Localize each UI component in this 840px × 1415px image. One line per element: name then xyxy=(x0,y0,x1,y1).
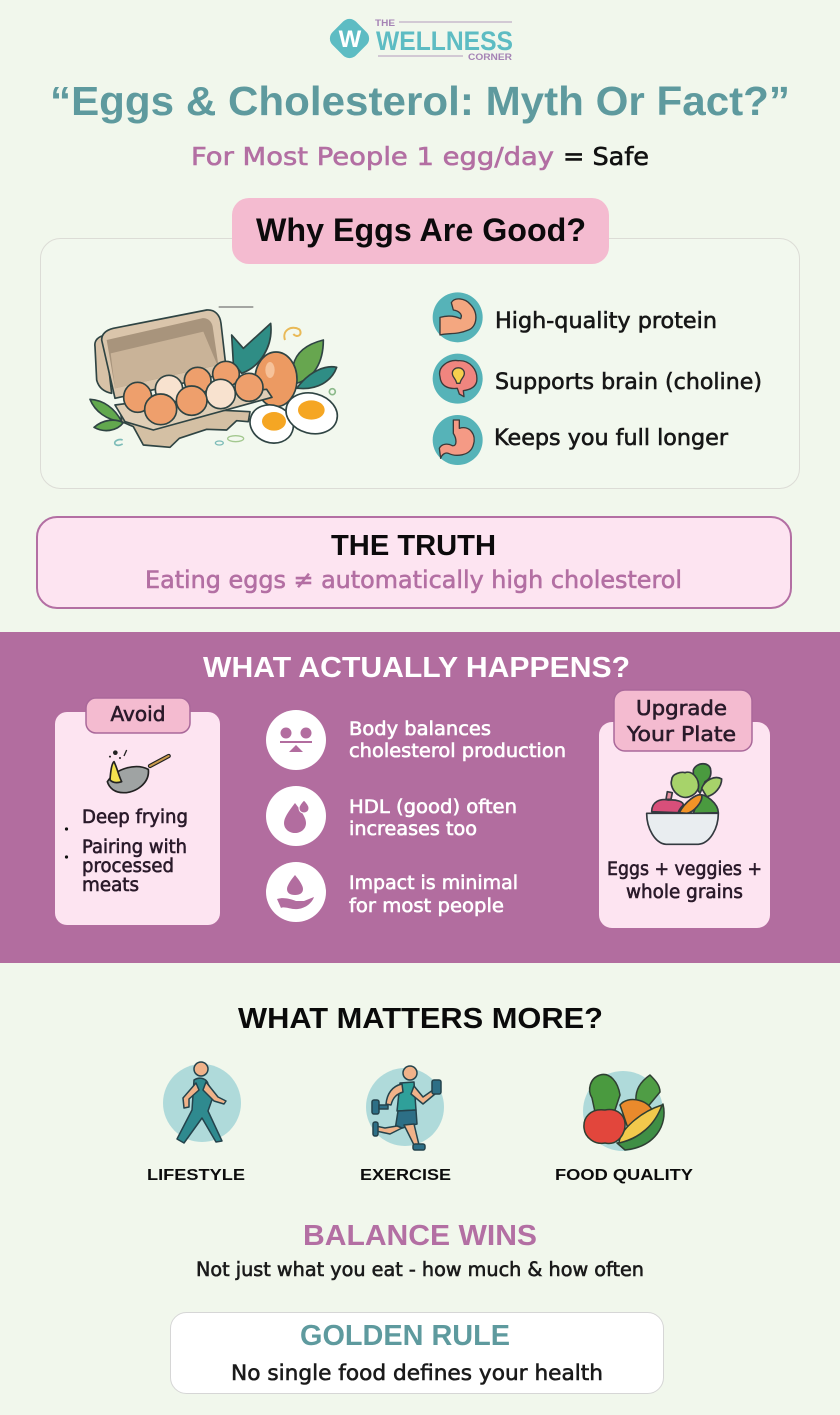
list: avoid items xyxy=(65,807,188,896)
logo: The Wellness Corner: THE xyxy=(375,18,395,28)
text: impact xyxy=(349,873,518,917)
heading: golden rule: GOLDEN RULE xyxy=(300,1320,510,1352)
text: eggs + veggies: Eggs + veggies + xyxy=(607,859,762,880)
icon: balance scale xyxy=(266,710,326,770)
list: avoid items: processed xyxy=(82,856,174,877)
logo: The Wellness Corner: W xyxy=(339,26,362,53)
icon: frying wok xyxy=(107,750,169,793)
text: hdl: increases too xyxy=(349,819,477,840)
text: body balances: Body balances xyxy=(349,719,491,740)
logo: The Wellness Corner: CORNER xyxy=(468,52,512,63)
subtitle: For Most People 1 egg/day xyxy=(191,142,554,171)
card: avoid xyxy=(55,698,220,925)
label: supports brain: Supports brain (choline) xyxy=(495,370,762,395)
text: body balances: cholesterol production xyxy=(349,741,566,762)
text: eggs + veggies xyxy=(607,859,762,903)
heading pill: why eggs are good xyxy=(232,198,609,264)
text: not just what you eat: Not just what you eat - how much & how often xyxy=(196,1258,644,1281)
icon: hand with drop xyxy=(266,862,326,922)
panel: why eggs are good xyxy=(40,198,800,488)
text: body balances xyxy=(349,719,566,762)
heading: what actually happens: WHAT ACTUALLY HAPPENS? xyxy=(203,652,630,684)
logo: The Wellness Corner xyxy=(326,15,513,63)
icon: stomach xyxy=(433,415,483,465)
icon: drops xyxy=(266,786,326,846)
heading: the truth: THE TRUTH xyxy=(331,530,496,562)
label: keeps you full longer: Keeps you full longer xyxy=(494,426,729,451)
label: high-quality protein: High-quality protein xyxy=(495,309,717,334)
label: exercise: EXERCISE xyxy=(360,1167,451,1184)
text: hdl xyxy=(349,797,517,840)
logo: The Wellness Corner: WELLNESS xyxy=(376,26,513,56)
icon: exercise runner with dumbbells xyxy=(366,1066,444,1150)
text: impact: Impact is minimal xyxy=(349,873,518,894)
text: no single food: No single food defines your health xyxy=(231,1361,603,1386)
text: eggs + veggies: whole grains xyxy=(626,882,743,903)
panel: what actually happens xyxy=(0,632,840,963)
card: upgrade your plate xyxy=(599,690,770,928)
list: avoid items: Deep frying xyxy=(82,807,188,828)
icon: lifestyle walking person xyxy=(163,1062,241,1143)
heading: what matters more: WHAT MATTERS MORE? xyxy=(238,1003,603,1035)
title: “Eggs & Cholesterol: Myth Or Fact?” xyxy=(50,78,790,124)
icon: salad bowl xyxy=(647,764,722,844)
panel: golden rule xyxy=(170,1312,664,1394)
tag: upgrade your plate: Your Plate xyxy=(626,722,736,746)
tag: avoid xyxy=(86,698,190,733)
label: food quality: FOOD QUALITY xyxy=(555,1167,693,1184)
list: avoid items: meats xyxy=(82,875,139,896)
illustration: egg carton with eggs and leaves xyxy=(90,307,342,449)
panel: the truth xyxy=(37,517,791,608)
list: avoid items: Pairing with xyxy=(82,837,187,858)
subtitle: = Safe xyxy=(563,142,649,171)
label: lifestyle: LIFESTYLE xyxy=(147,1167,245,1184)
heading: balance wins: BALANCE WINS xyxy=(303,1220,537,1252)
tag: upgrade your plate xyxy=(614,690,752,751)
icon: brain with light bulb xyxy=(433,354,483,404)
text: impact: for most people xyxy=(349,896,504,917)
heading pill: why eggs are good: Why Eggs Are Good? xyxy=(256,212,586,248)
tag: upgrade your plate: Upgrade xyxy=(636,696,727,720)
icon: food quality fruit and vegetables xyxy=(583,1071,664,1151)
icon: flexed arm xyxy=(433,292,483,342)
text: eating eggs: Eating eggs ≠ automatically high cholesterol xyxy=(145,566,682,594)
text: hdl: HDL (good) often xyxy=(349,797,517,818)
tag: avoid: Avoid xyxy=(110,702,166,726)
